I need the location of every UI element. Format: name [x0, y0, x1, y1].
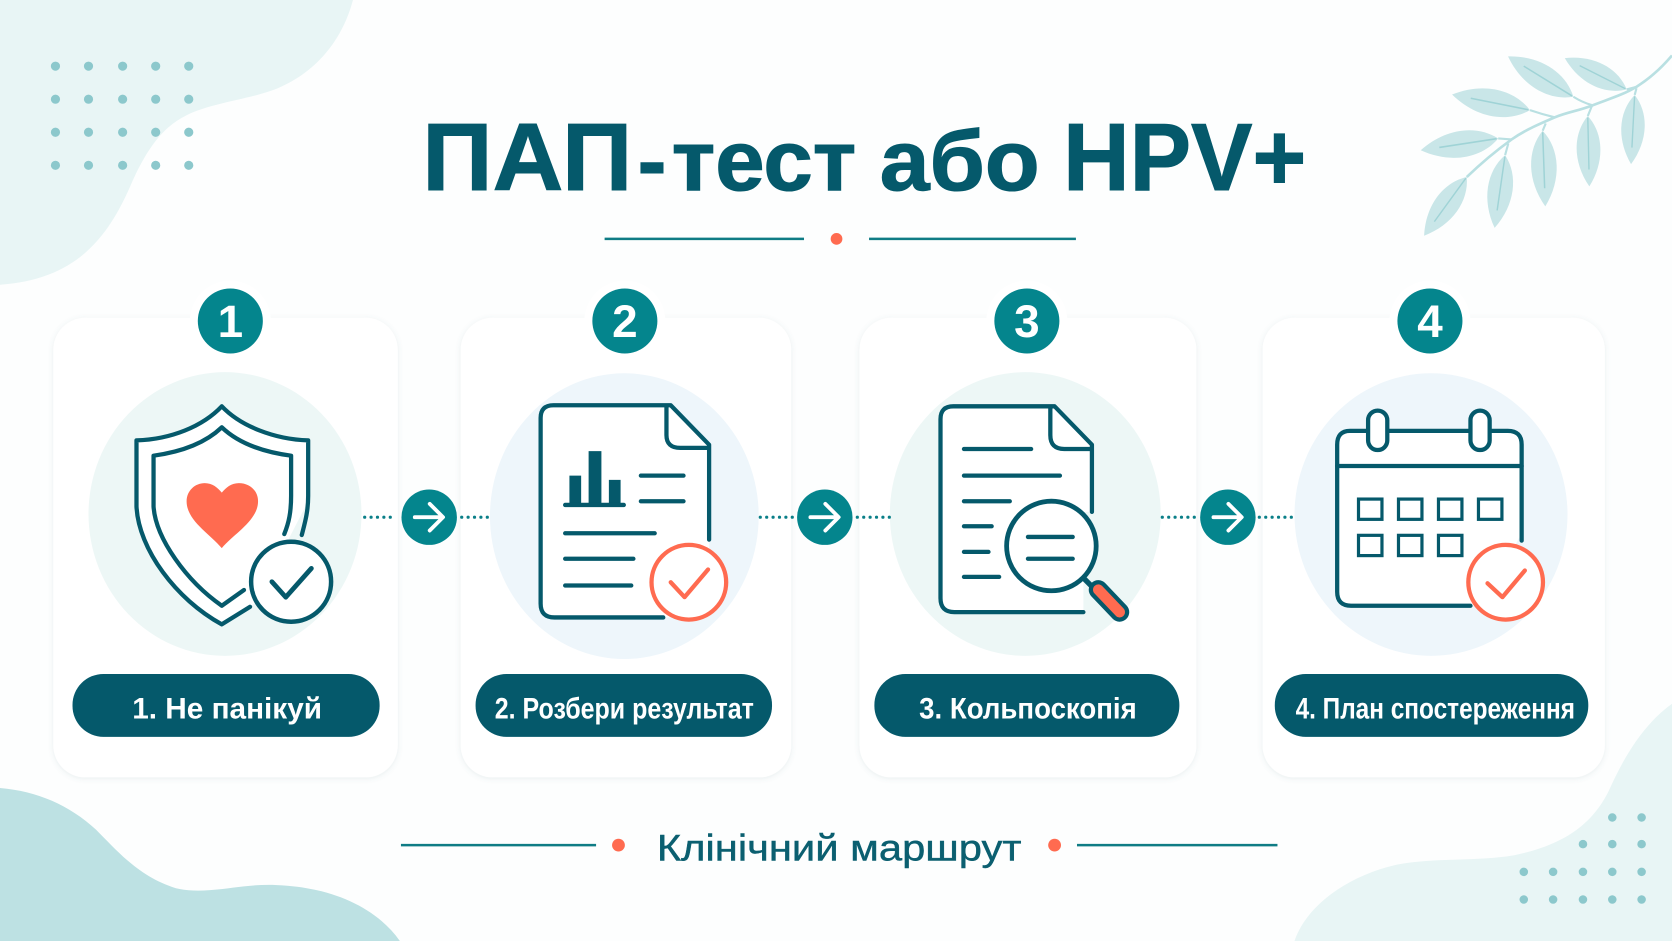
- number badge 2: 2: [612, 295, 638, 347]
- panel: step 3: [859, 280, 1196, 777]
- panel: step 2: [461, 280, 791, 777]
- title: ПАП: [422, 104, 632, 211]
- icon: shield with heart and check: [136, 406, 331, 624]
- footer caption: [401, 827, 1277, 869]
- arrow: step 1 to 2: [365, 489, 494, 545]
- title: або: [880, 114, 1040, 209]
- title: -: [638, 114, 666, 209]
- footer caption: Клінічний маршрут: [657, 827, 1022, 869]
- arrow: step 3 to 4: [1162, 489, 1293, 545]
- decorative leaf branch: top right: [1414, 45, 1672, 243]
- number badge 1: 1: [218, 295, 243, 347]
- decorative blob: bottom right: [1295, 704, 1672, 941]
- label pill 4: 4. План спостереження: [1296, 693, 1575, 726]
- icon: calendar with check: [1337, 411, 1543, 620]
- number badge 4: [1389, 280, 1470, 362]
- icon: document with magnifier: [940, 406, 1120, 612]
- decorative blob: top left: [0, 0, 353, 285]
- card 2: [461, 318, 791, 777]
- arrow: step 2 to 3: [760, 489, 891, 545]
- number badge 1: [190, 280, 271, 362]
- number badge 2: [584, 280, 665, 362]
- card 3: [859, 318, 1196, 777]
- label pill 4: [1275, 674, 1588, 737]
- icon backdrop 4: [1295, 373, 1568, 656]
- label pill 2: 2. Розбери результат: [495, 693, 754, 726]
- number badge 3: 3: [1014, 295, 1040, 347]
- number badge 4: 4: [1417, 295, 1443, 347]
- icon backdrop 2: [490, 373, 759, 659]
- icon backdrop 3: [890, 372, 1161, 656]
- label pill 1: 1. Не панікуй: [132, 693, 322, 726]
- title: тест: [672, 114, 856, 209]
- label pill 3: 3. Кольпоскопія: [919, 693, 1137, 726]
- panel: step 4: [1263, 280, 1605, 777]
- panel: step 1: [53, 280, 398, 777]
- decorative blob: bottom left: [0, 788, 400, 941]
- label pill 3: [874, 674, 1179, 737]
- dot grid: top left: [51, 62, 193, 170]
- title: HPV+: [1063, 104, 1306, 211]
- icon backdrop 1: [89, 372, 361, 656]
- number badge 3: [986, 280, 1067, 362]
- label pill 2: [476, 674, 772, 737]
- card 1: [53, 318, 398, 777]
- title divider: [605, 233, 1076, 245]
- card 4: [1263, 318, 1605, 777]
- dot grid: bottom right: [1520, 813, 1646, 904]
- label pill 1: [73, 674, 380, 737]
- icon: report document with check: [541, 405, 726, 620]
